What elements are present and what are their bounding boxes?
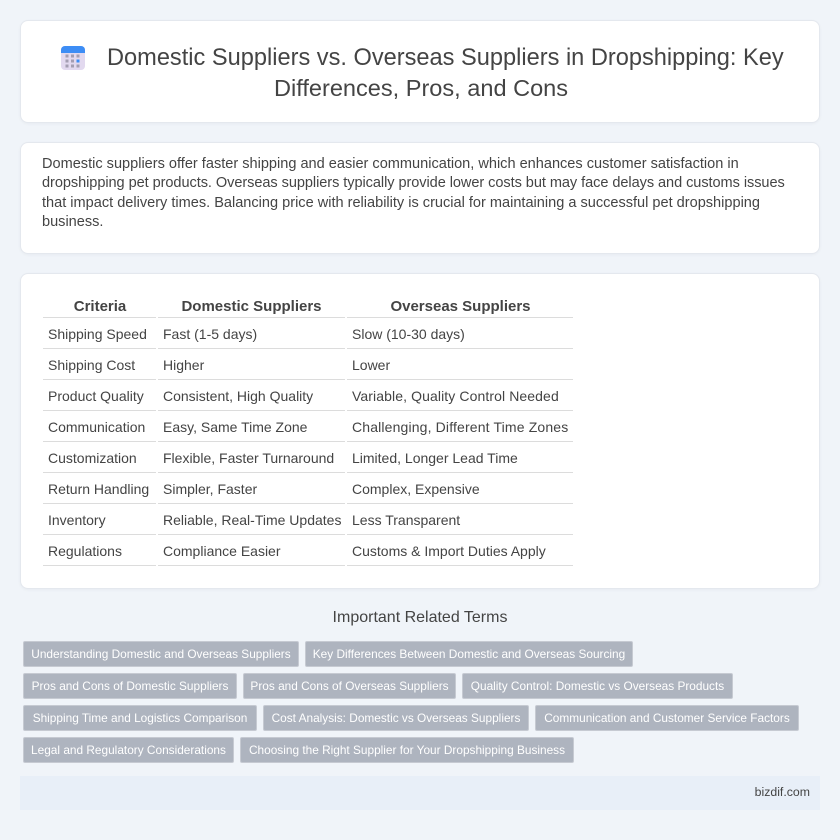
table header: Overseas Suppliers — [390, 298, 531, 315]
table header — [74, 298, 531, 315]
intro paragraph: business. — [42, 214, 103, 230]
tag: Pros and Cons of Domestic Suppliers — [32, 679, 228, 693]
tag: Pros and Cons of Overseas Suppliers — [250, 679, 449, 693]
tag: Shipping Time and Logistics Comparison — [33, 711, 247, 725]
tag — [243, 673, 456, 699]
tag: Legal and Regulatory Considerations — [31, 743, 226, 757]
row: regulations: Regulations — [48, 543, 122, 559]
related terms heading: Important Related Terms — [333, 609, 507, 626]
table header: Domestic Suppliers — [181, 298, 322, 315]
row: shipping cost: Higher — [163, 357, 204, 373]
tag — [23, 673, 237, 699]
row: communication: Easy, Same Time Zone — [163, 419, 307, 435]
row: customization: Limited, Longer Lead Time — [352, 450, 518, 466]
title: Domestic Suppliers vs. Overseas Suppliers in Dropshipping: Key — [107, 45, 784, 71]
row: communication — [48, 419, 568, 435]
header panel — [20, 20, 820, 123]
row: shipping speed: Shipping Speed — [48, 326, 147, 342]
row: communication: Communication — [48, 419, 145, 435]
row: return handling — [48, 481, 480, 497]
table header: Criteria — [74, 298, 126, 315]
tag: Cost Analysis: Domestic vs Overseas Suppliers — [272, 711, 520, 725]
tag — [23, 641, 299, 667]
footer source text: bizdif.com — [755, 785, 810, 799]
title — [107, 45, 784, 101]
row: product quality — [48, 388, 559, 404]
tag — [535, 705, 799, 731]
row: inventory: Reliable, Real-Time Updates — [163, 512, 341, 528]
row: shipping speed: Fast (1-5 days) — [163, 326, 257, 342]
tag — [305, 641, 633, 667]
footer bar — [20, 776, 820, 810]
row: shipping speed — [48, 326, 465, 342]
row: customization — [48, 450, 518, 466]
row: shipping cost: Lower — [352, 357, 390, 373]
tag: Quality Control: Domestic vs Overseas Products — [471, 679, 724, 693]
tag: Communication and Customer Service Factors — [544, 711, 790, 725]
tag — [462, 673, 733, 699]
tag — [263, 705, 529, 731]
tag: Key Differences Between Domestic and Overseas Sourcing — [313, 647, 625, 661]
row: shipping speed: Slow (10-30 days) — [352, 326, 465, 342]
row: customization: Flexible, Faster Turnaround — [163, 450, 334, 466]
icon: calendar — [61, 46, 85, 70]
row: regulations — [48, 543, 546, 559]
tag: Choosing the Right Supplier for Your Dropshipping Business — [249, 743, 565, 757]
tag: Understanding Domestic and Overseas Suppliers — [31, 647, 291, 661]
intro paragraph: that impact delivery times. Balancing price with reliability is crucial for maintaining a successful pet dropshipping — [42, 195, 760, 211]
tag — [23, 737, 234, 763]
title: Differences, Pros, and Cons — [274, 75, 568, 101]
row: inventory: Inventory — [48, 512, 106, 528]
intro paragraph: Domestic suppliers offer faster shipping and easier communication, which enhances customer satisfaction in — [42, 156, 739, 172]
row: product quality: Consistent, High Quality — [163, 388, 313, 404]
row: return handling: Complex, Expensive — [352, 481, 480, 497]
row: regulations: Compliance Easier — [163, 543, 280, 559]
row: communication: Challenging, Different Time Zones — [352, 419, 568, 435]
row: regulations: Customs & Import Duties Apply — [352, 543, 546, 559]
intro paragraph: dropshipping pet products. Overseas suppliers typically provide lower costs but may face delays and customs issues — [42, 175, 785, 191]
row: customization: Customization — [48, 450, 137, 466]
row: return handling: Simpler, Faster — [163, 481, 257, 497]
row: inventory — [48, 512, 460, 528]
row: return handling: Return Handling — [48, 481, 149, 497]
intro text panel — [20, 142, 820, 254]
row: product quality: Variable, Quality Control Needed — [352, 388, 559, 404]
row: shipping cost — [48, 357, 390, 373]
tag — [23, 705, 257, 731]
row: product quality: Product Quality — [48, 388, 144, 404]
related terms tags — [23, 641, 799, 763]
intro paragraph — [42, 156, 785, 230]
tag — [240, 737, 574, 763]
row: inventory: Less Transparent — [352, 512, 460, 528]
row: shipping cost: Shipping Cost — [48, 357, 135, 373]
comparison table panel — [20, 273, 820, 589]
